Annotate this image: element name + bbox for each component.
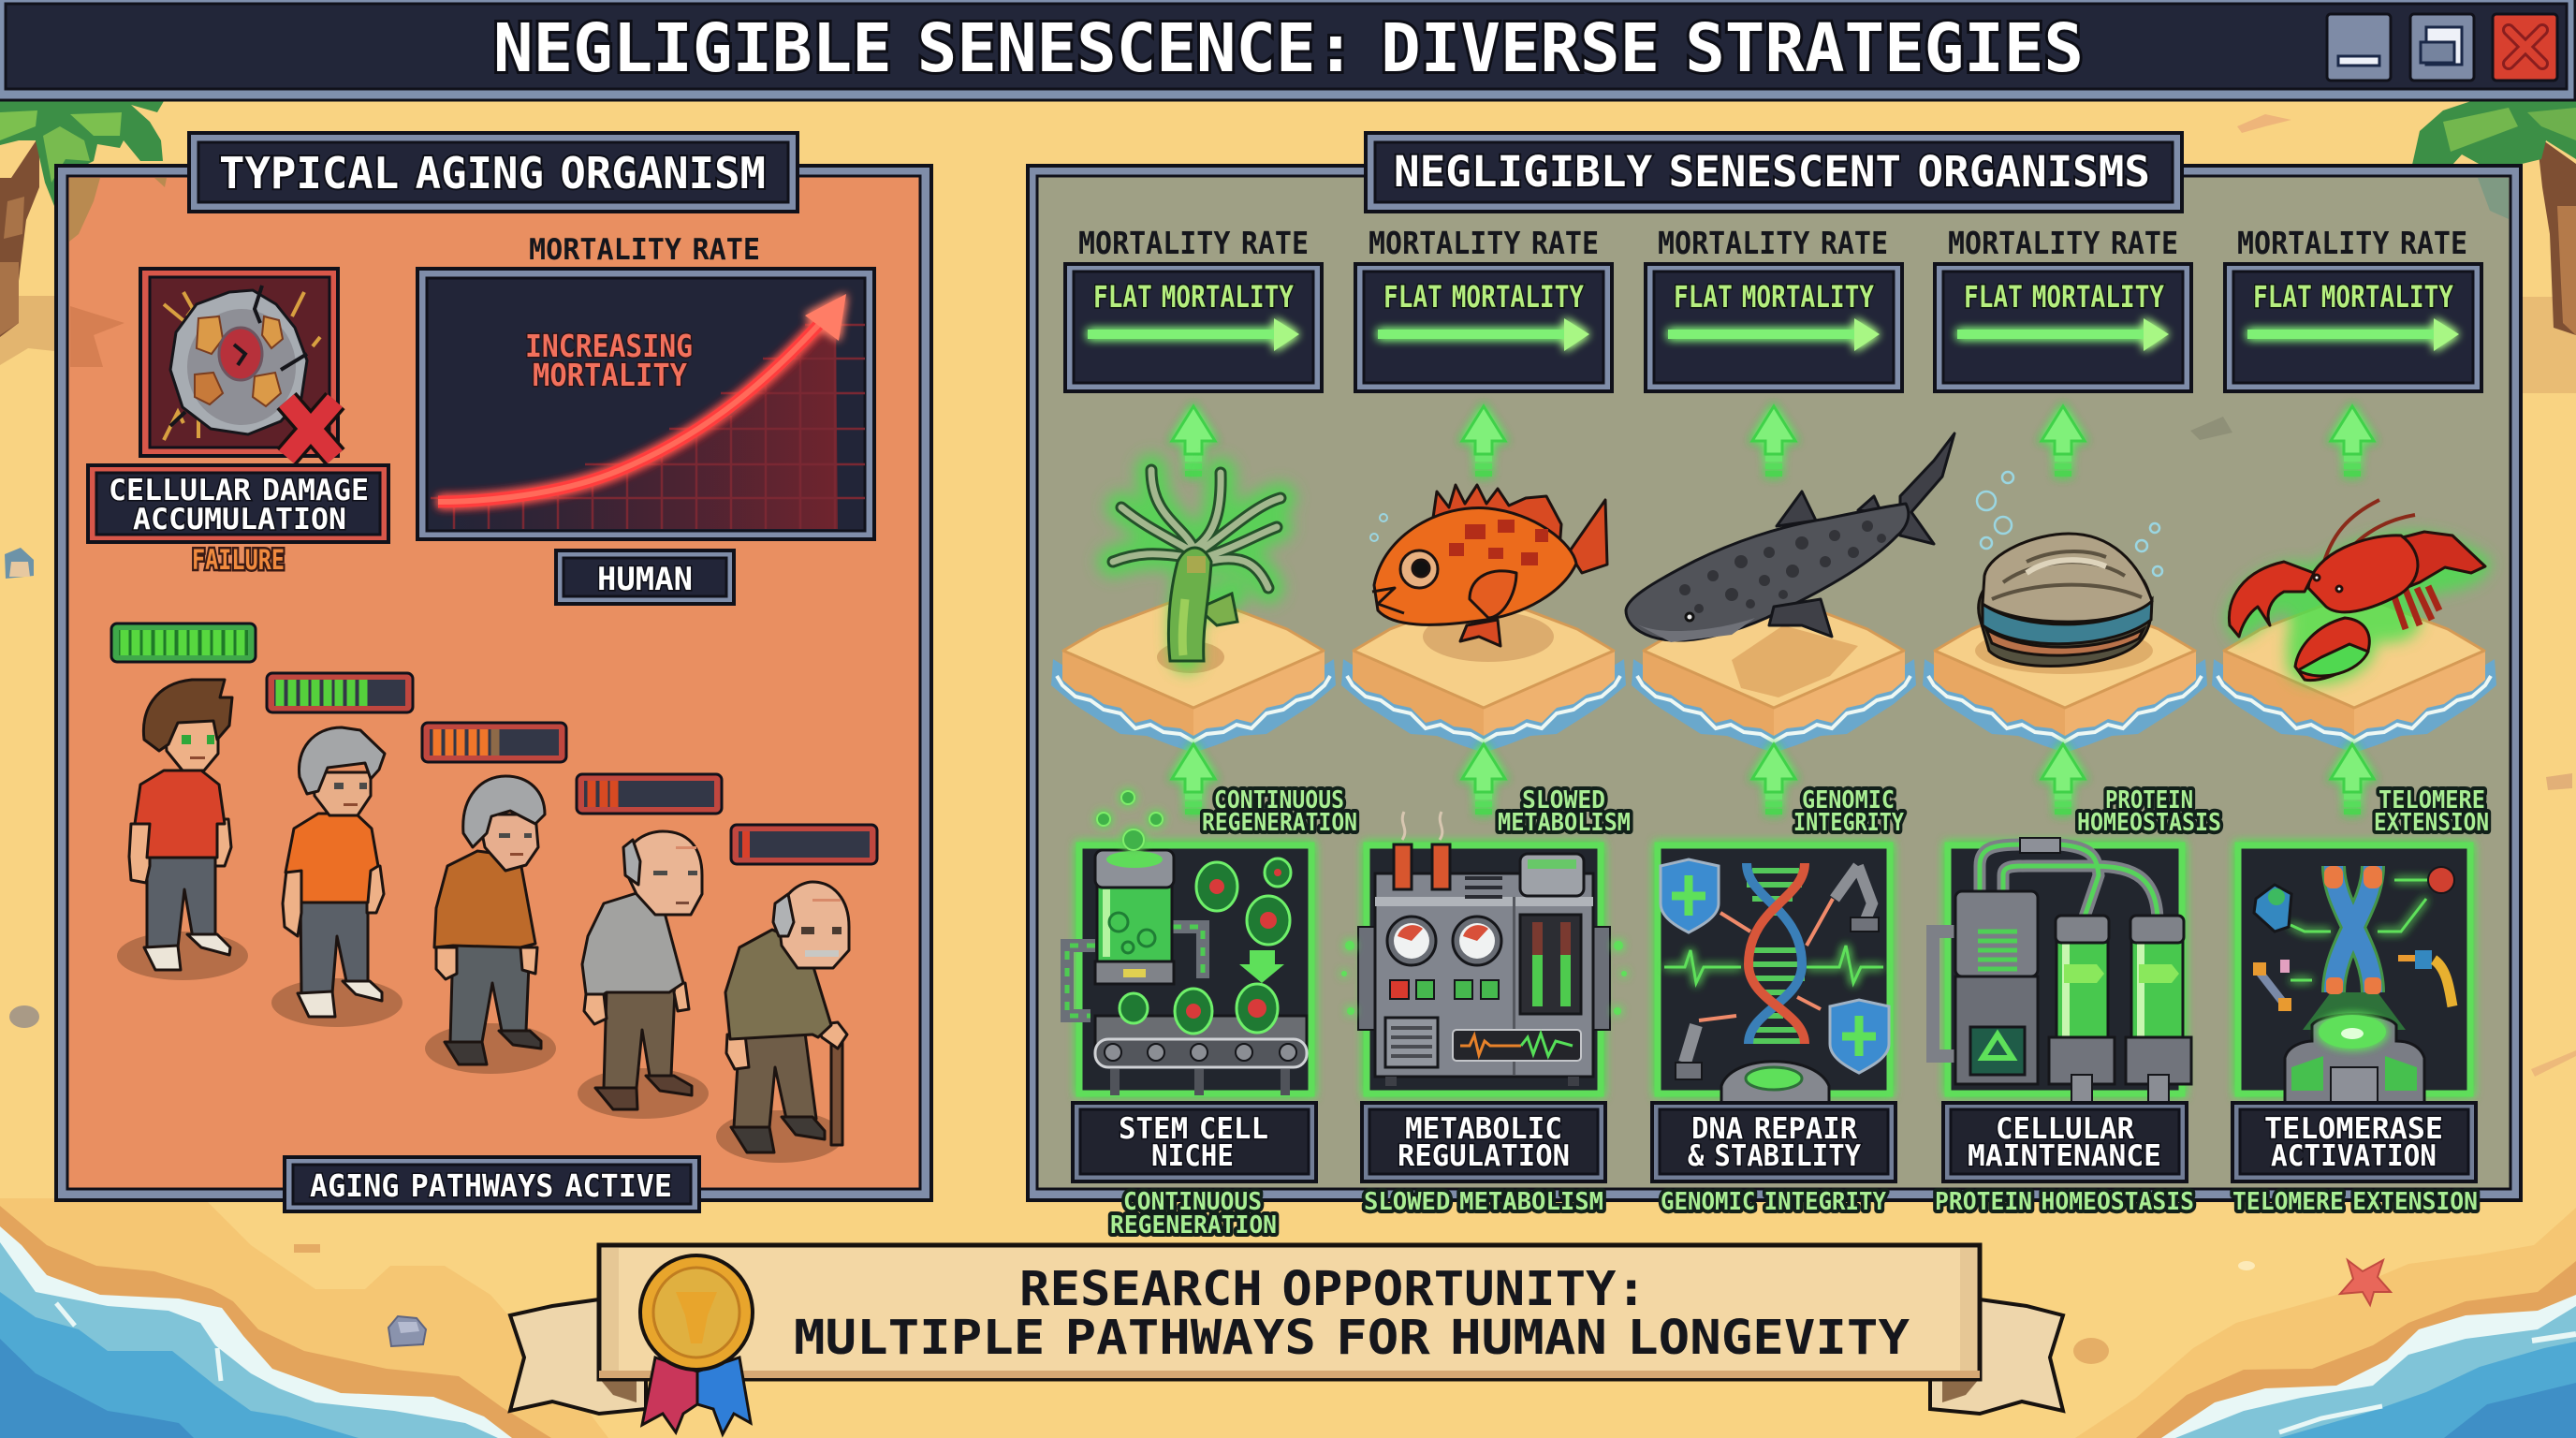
label: slowed metabolism side: SLOWED <box>1522 786 1605 814</box>
label: failure: FAILURE <box>192 544 285 576</box>
label: cellular maintenance: CELLULAR <box>1996 1112 2134 1146</box>
column 5 mortality: flat: MORTALITY RATE <box>2237 225 2467 261</box>
label: dna repair and stability <box>1652 1103 1895 1181</box>
panel: negligibly senescent organisms <box>1028 133 2521 1240</box>
label: continuous regeneration bottom: CONTINUOUS <box>1123 1188 1262 1216</box>
column 4 mortality: flat: FLAT MORTALITY <box>1964 279 2165 315</box>
banner text <box>794 1262 1910 1366</box>
banner: research opportunity <box>510 1245 2063 1434</box>
label: cellular damage accumulation: CELLULAR DAMAGE <box>109 474 369 507</box>
icon: starfish <box>2340 1260 2391 1305</box>
label: stem cell niche: STEM CELL <box>1119 1112 1268 1146</box>
person: older adult <box>425 776 556 1074</box>
icon: palm tree left <box>0 101 164 365</box>
label: cellular damage accumulation <box>88 465 388 542</box>
label: telomerase activation: TELOMERASE <box>2264 1112 2443 1146</box>
health bar: low <box>577 774 722 814</box>
islands: sand platforms <box>1051 594 2496 753</box>
label: continuous regeneration side: CONTINUOUS <box>1214 786 1344 814</box>
title: NEGLIGIBLE SENESCENCE: DIVERSE STRATEGIES <box>493 9 2084 87</box>
label: slowed metabolism side <box>1498 786 1631 837</box>
organism: greenland shark <box>1626 433 1954 697</box>
icon: enzyme pieces <box>2253 867 2454 1011</box>
label: metabolic regulation: REGULATION <box>1398 1139 1570 1173</box>
heading: typical aging organism: TYPICAL AGING ORGANISM <box>219 148 766 198</box>
heading: negligibly senescent organisms <box>1366 133 2182 212</box>
label: slowed metabolism side: METABOLISM <box>1498 809 1631 837</box>
label: telomerase activation: ACTIVATION <box>2271 1139 2437 1173</box>
machine: metabolic regulation <box>1341 812 1627 1093</box>
label: protein homeostasis side: PROTEIN <box>2105 786 2193 814</box>
label: telomere extension side <box>2374 786 2489 837</box>
icon: red X <box>286 401 335 457</box>
label: human <box>556 550 734 604</box>
banner text: MULTIPLE PATHWAYS FOR HUMAN LONGEVITY <box>794 1311 1910 1366</box>
column 3 mortality: flat <box>1646 225 1902 391</box>
icon: maximize button <box>2410 14 2474 81</box>
label: increasing mortality: INCREASING <box>525 328 693 364</box>
label: continuous regeneration side <box>1202 786 1357 837</box>
health bar: critical <box>731 825 877 864</box>
chart: increasing mortality curve <box>417 269 874 539</box>
icon: close button <box>2493 14 2557 81</box>
label: cellular damage accumulation: ACCUMULATION <box>133 503 346 536</box>
label: telomere extension bottom: TELOMERE EXTENSION <box>2232 1188 2478 1216</box>
label: cellular maintenance <box>1943 1103 2187 1181</box>
organism: ocean quahog clam <box>1975 472 2162 674</box>
column 4 mortality: flat: MORTALITY RATE <box>1948 225 2178 261</box>
health bar: three quarters <box>267 673 413 712</box>
label: human: HUMAN <box>597 561 693 598</box>
label: telomere extension side: EXTENSION <box>2374 809 2489 837</box>
label: stem cell niche <box>1073 1103 1316 1181</box>
arrows: up from organisms to mortality <box>1172 406 2374 477</box>
label: metabolic regulation <box>1362 1103 1605 1181</box>
label: increasing mortality: MORTALITY <box>533 357 687 393</box>
heading: typical aging organism <box>189 133 798 212</box>
machine: stem cell niche <box>1067 791 1311 1095</box>
label: continuous regeneration side: REGENERATION <box>1202 809 1357 837</box>
column 3 mortality: flat: MORTALITY RATE <box>1658 225 1888 261</box>
label: dna repair and stability: & STABILITY <box>1688 1139 1861 1173</box>
label: mortality rate: MORTALITY RATE <box>529 233 760 267</box>
icon: rock on beach <box>388 1316 426 1346</box>
column 5 mortality: flat <box>2225 225 2481 391</box>
column 2 mortality: flat: FLAT MORTALITY <box>1383 279 1585 315</box>
machine: telomerase activation <box>2238 845 2470 1103</box>
label: genomic integrity side: INTEGRITY <box>1793 809 1904 837</box>
label: protein homeostasis bottom: PROTEIN HOMEOSTASIS <box>1935 1188 2194 1216</box>
label: stem cell niche: NICHE <box>1151 1139 1234 1173</box>
banner text: RESEARCH OPPORTUNITY: <box>1019 1262 1647 1317</box>
machine: cellular maintenance <box>1933 838 2191 1103</box>
label: protein homeostasis side: HOMEOSTASIS <box>2077 809 2221 837</box>
column 2 mortality: flat: MORTALITY RATE <box>1368 225 1599 261</box>
column 4 mortality: flat <box>1935 225 2191 391</box>
label: metabolic regulation: METABOLIC <box>1405 1112 1562 1146</box>
person: middle aged <box>271 727 402 1027</box>
column 5 mortality: flat: FLAT MORTALITY <box>2253 279 2454 315</box>
column 2 mortality: flat <box>1355 225 1612 391</box>
label: genomic integrity side <box>1793 786 1904 837</box>
person: frail elder with cane <box>716 882 849 1163</box>
label: telomere extension side: TELOMERE <box>2378 786 2485 814</box>
title bar <box>0 0 2575 100</box>
health bar: half <box>422 723 566 762</box>
label: aging pathways active <box>285 1157 699 1211</box>
label: continuous regeneration bottom <box>1110 1188 1277 1240</box>
icon: damaged cell <box>140 269 338 456</box>
organism: lobster <box>2226 500 2492 684</box>
label: protein homeostasis side <box>2077 786 2221 837</box>
icon: minimize button <box>2327 14 2391 81</box>
label: genomic integrity bottom: GENOMIC INTEGRITY <box>1661 1188 1886 1216</box>
organism: hydra <box>1113 470 1281 673</box>
organism: rockfish <box>1370 485 1607 662</box>
label: dna repair and stability: DNA REPAIR <box>1691 1112 1857 1146</box>
machine: dna repair and stability <box>1658 845 1890 1103</box>
icon: shield bottom <box>1830 1000 1889 1073</box>
label: genomic integrity side: GENOMIC <box>1802 786 1895 814</box>
heading: negligibly senescent organisms: NEGLIGIBLY SENESCENT ORGANISMS <box>1394 147 2150 197</box>
label: cellular maintenance: MAINTENANCE <box>1968 1139 2161 1173</box>
label: slowed metabolism bottom: SLOWED METABOLISM <box>1364 1188 1603 1216</box>
label: aging pathways active: AGING PATHWAYS ACTIVE <box>310 1167 672 1204</box>
icon: gold medal <box>640 1255 753 1434</box>
person: elderly <box>578 831 709 1119</box>
label: telomerase activation <box>2232 1103 2476 1181</box>
arrows: up from mechanisms to organisms <box>1172 744 2374 814</box>
column 1 mortality: flat: MORTALITY RATE <box>1078 225 1309 261</box>
health bar: full <box>111 624 256 662</box>
label: increasing mortality <box>525 328 693 393</box>
icon: palm tree right <box>2412 101 2576 393</box>
column 1 mortality: flat <box>1065 225 1322 391</box>
icon: shield top <box>1661 859 1719 932</box>
label: continuous regeneration bottom: REGENERATION <box>1110 1211 1277 1240</box>
column 3 mortality: flat: FLAT MORTALITY <box>1674 279 1875 315</box>
column 1 mortality: flat: FLAT MORTALITY <box>1093 279 1295 315</box>
person: young adult <box>117 680 248 980</box>
panel: typical aging organism <box>56 133 931 1211</box>
